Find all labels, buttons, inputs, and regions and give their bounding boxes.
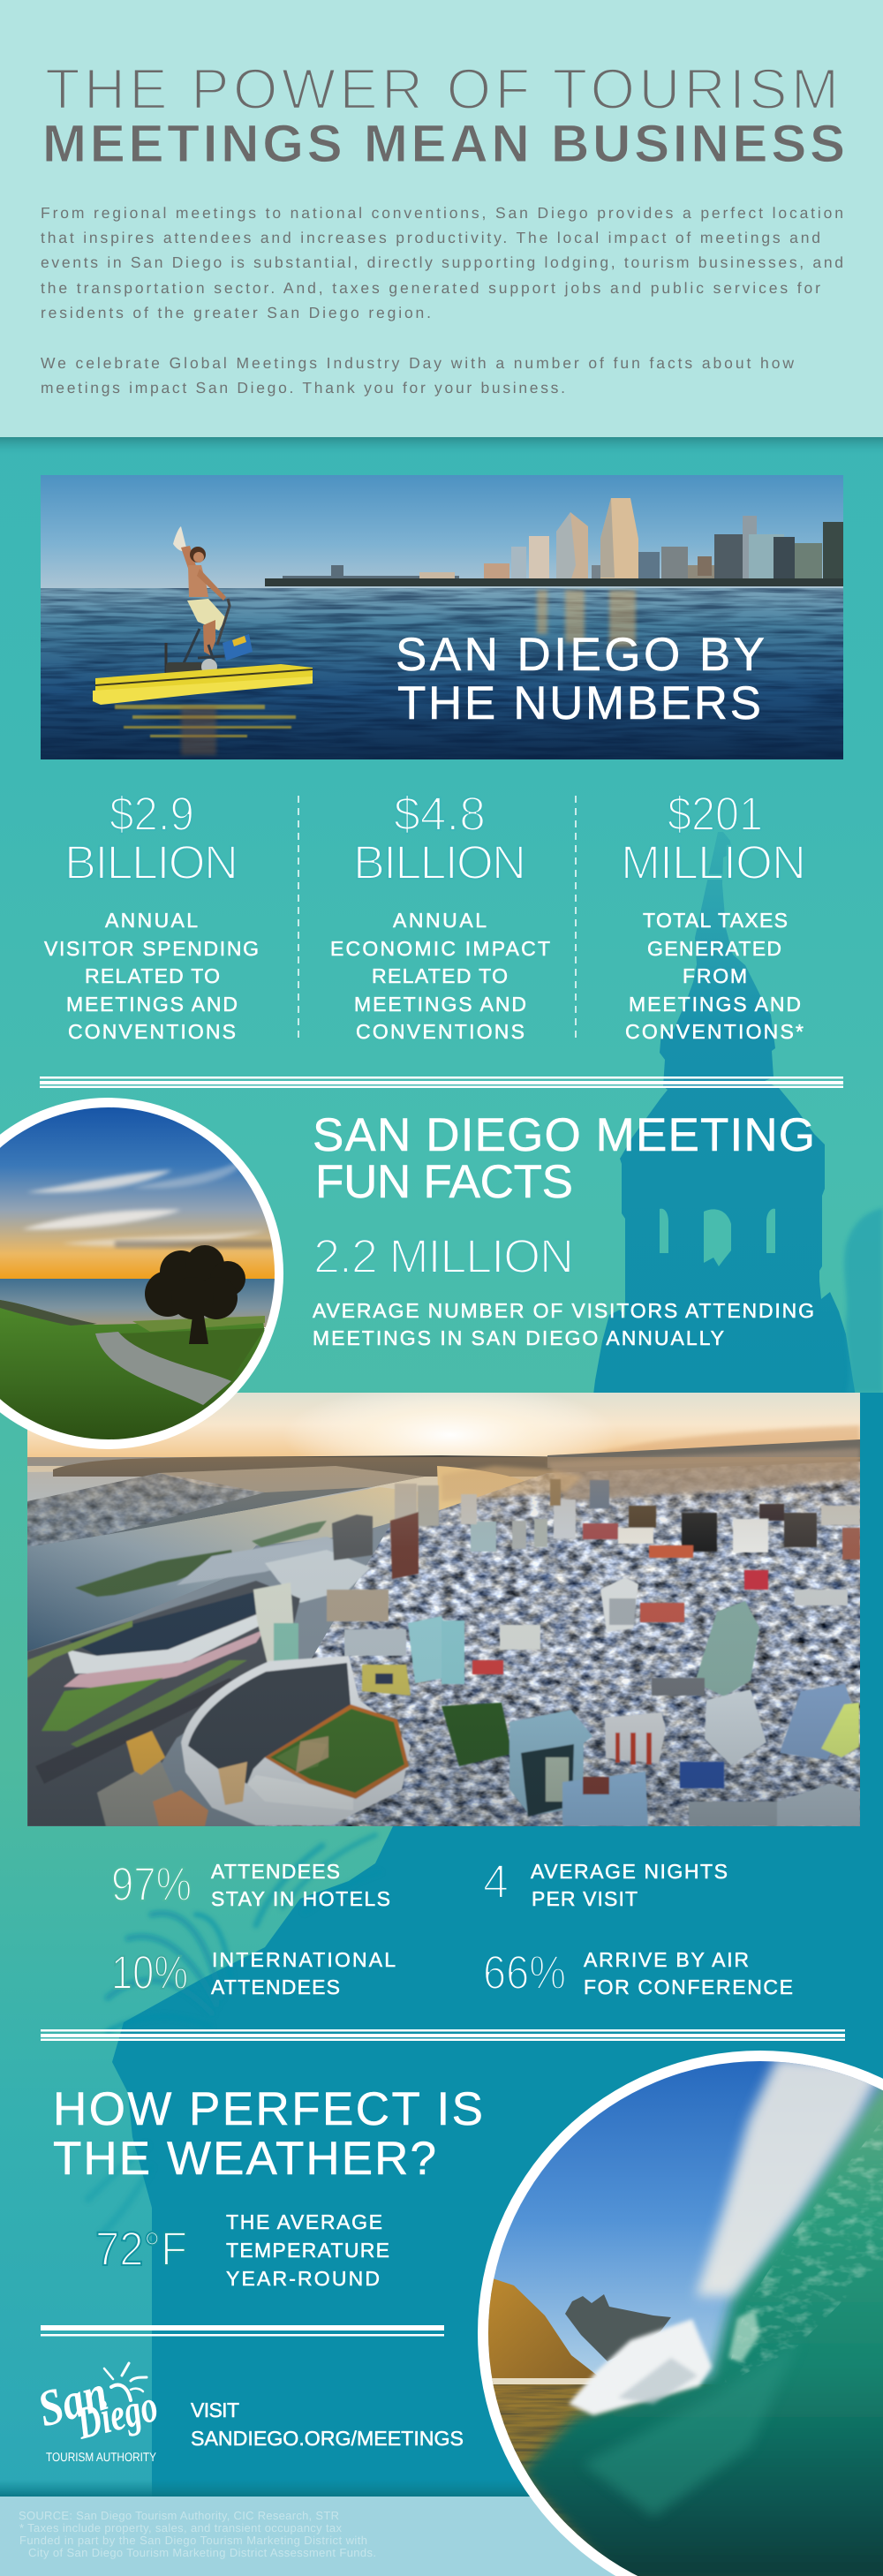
tower silhouette bbox=[590, 832, 860, 1423]
stat: 66 percent: FOR CONFERENCE bbox=[584, 1975, 793, 1998]
weather heading: THE WEATHER? bbox=[53, 2133, 436, 2185]
stat: 4 nights bbox=[483, 1855, 728, 1910]
stat: 10 percent: INTERNATIONAL bbox=[212, 1948, 396, 1971]
stat: 72 degrees: THE AVERAGE bbox=[226, 2210, 382, 2233]
intro text block: We celebrate Global Meetings Industry Day with a number of fun facts about how bbox=[41, 354, 794, 372]
fun facts text: MEETINGS IN SAN DIEGO ANNUALLY bbox=[313, 1326, 724, 1349]
stat: 201 million bbox=[621, 788, 806, 1043]
spray bbox=[696, 2058, 883, 2296]
source text: City of San Diego Tourism Marketing District Assessment Funds. bbox=[28, 2546, 376, 2559]
stat: 4.8 billion: $4.8 bbox=[394, 788, 486, 841]
stat: 66 percent: 66% bbox=[483, 1946, 566, 1999]
stat: 4.8 billion: MEETINGS AND bbox=[354, 993, 526, 1016]
petco park stadium bbox=[181, 1656, 411, 1825]
hero heading: SAN DIEGO BY bbox=[396, 629, 765, 681]
stat: 2.9 billion: RELATED TO bbox=[85, 964, 220, 987]
right palm silhouette bbox=[844, 1208, 883, 1394]
source text: * Taxes include property, sales, and transient occupancy tax bbox=[19, 2521, 343, 2534]
water foreground bbox=[477, 2384, 883, 2576]
stat: 2.9 billion: MEETINGS AND bbox=[66, 993, 238, 1016]
stat: 2.9 billion: VISITOR SPENDING bbox=[44, 937, 259, 960]
stat: 97 percent: STAY IN HOTELS bbox=[211, 1887, 390, 1910]
surf wave photo circle bbox=[477, 2051, 883, 2576]
stat: 10 percent: 10% bbox=[111, 1946, 188, 1999]
stat: 72 degrees: YEAR-ROUND bbox=[226, 2267, 380, 2290]
title bbox=[42, 57, 845, 173]
person on water bike bbox=[93, 526, 313, 755]
aerial city photo bbox=[27, 1384, 860, 1826]
fun facts text bbox=[313, 1109, 815, 1349]
San Diego Tourism Authority logo bbox=[32, 2363, 162, 2464]
stat: 66 percent bbox=[483, 1946, 793, 1999]
golf course photo circle bbox=[0, 1098, 283, 1462]
wave body bbox=[521, 2058, 883, 2576]
source text: Funded in part by the San Diego Tourism Marketing District with bbox=[19, 2534, 367, 2547]
intro text block: residents of the greater San Diego region. bbox=[41, 304, 431, 321]
stat: 72 degrees: TEMPERATURE bbox=[226, 2239, 389, 2262]
weather heading bbox=[53, 2083, 483, 2185]
visit link bbox=[191, 2398, 464, 2450]
downtown towers bbox=[442, 1479, 860, 1826]
fun facts text: SAN DIEGO MEETING bbox=[313, 1109, 815, 1161]
stat: 2.9 billion: ANNUAL bbox=[105, 909, 198, 932]
convention center bbox=[27, 1581, 300, 1826]
hero heading: THE NUMBERS bbox=[397, 677, 761, 729]
intro text block: meetings impact San Diego. Thank you for your business. bbox=[41, 379, 565, 397]
source text: SOURCE: San Diego Tourism Authority, CIC Research, STR bbox=[19, 2509, 339, 2522]
stat: 4.8 billion: BILLION bbox=[353, 836, 526, 889]
stat: 66 percent: ARRIVE BY AIR bbox=[584, 1948, 749, 1971]
source text bbox=[19, 2509, 376, 2559]
stat: 201 million: FROM bbox=[683, 964, 747, 987]
fun facts text: FUN FACTS bbox=[315, 1156, 573, 1208]
stat: 4 nights: PER VISIT bbox=[532, 1887, 638, 1910]
stat: 10 percent bbox=[111, 1946, 396, 1999]
stat: 201 million: TOTAL TAXES bbox=[643, 909, 788, 932]
intro text block: the transportation sector. And, taxes generated support jobs and public services for bbox=[41, 279, 820, 297]
stat: 4.8 billion: CONVENTIONS bbox=[356, 1020, 525, 1043]
intro text block: events in San Diego is substantial, directly supporting lodging, tourism businesses, and bbox=[41, 253, 843, 271]
San Diego Tourism Authority logo: San bbox=[32, 2364, 114, 2437]
title: MEETINGS MEAN BUSINESS bbox=[42, 114, 845, 173]
stat: 201 million: MEETINGS AND bbox=[629, 993, 801, 1016]
fun facts text: AVERAGE NUMBER OF VISITORS ATTENDING bbox=[313, 1299, 814, 1322]
visit link: VISIT bbox=[191, 2398, 239, 2421]
stat: 2.9 billion: BILLION bbox=[64, 836, 238, 889]
intro text block bbox=[41, 204, 843, 397]
stat: 2.9 billion: $2.9 bbox=[109, 788, 194, 841]
San Diego Tourism Authority logo: TOURISM AUTHORITY bbox=[46, 2450, 157, 2464]
stat: 72 degrees bbox=[95, 2210, 389, 2290]
cliff bbox=[488, 2278, 597, 2391]
title: THE POWER OF TOURISM bbox=[45, 57, 839, 121]
stat: 201 million: $201 bbox=[668, 788, 763, 841]
stat: 201 million: CONVENTIONS* bbox=[625, 1020, 804, 1043]
stat: 97 percent bbox=[111, 1858, 390, 1911]
stat: 2.9 billion: CONVENTIONS bbox=[68, 1020, 236, 1043]
deep teal shape with lower palm and trunk bbox=[88, 1393, 883, 2499]
stat: 4.8 billion: ANNUAL bbox=[393, 909, 487, 932]
stat: 4.8 billion: RELATED TO bbox=[372, 964, 508, 987]
hero photo: pedal boat on San Diego Bay with skyline bbox=[41, 475, 843, 759]
embarcadero park island bbox=[75, 1550, 233, 1597]
stat: 10 percent: ATTENDEES bbox=[211, 1975, 340, 1998]
stat: 97 percent: ATTENDEES bbox=[211, 1860, 340, 1883]
San Diego Tourism Authority logo: Diego bbox=[71, 2381, 162, 2450]
icon: sun rays bbox=[104, 2363, 147, 2400]
stat: 4.8 billion: ECONOMIC IMPACT bbox=[330, 937, 550, 960]
fun facts text: 2.2 MILLION bbox=[313, 1230, 574, 1283]
intro text block: From regional meetings to national conventions, San Diego provides a perfect location bbox=[41, 204, 843, 222]
stat: 4 nights: 4 bbox=[483, 1855, 509, 1908]
stat: 72 degrees: 72°F bbox=[95, 2223, 187, 2276]
header panel bbox=[0, 0, 883, 437]
intro text block: that inspires attendees and increases productivity. The local impact of meetings and bbox=[41, 229, 820, 246]
footer source panel bbox=[0, 2497, 883, 2576]
visit link: SANDIEGO.ORG/MEETINGS bbox=[191, 2427, 464, 2450]
hero heading bbox=[397, 638, 765, 720]
city blocks texture bbox=[265, 1462, 860, 1826]
weather heading: HOW PERFECT IS bbox=[53, 2083, 483, 2135]
stat: 201 million: GENERATED bbox=[647, 937, 781, 960]
stat: 201 million: MILLION bbox=[621, 836, 806, 889]
stat: 4.8 billion bbox=[330, 788, 550, 1043]
rooftop park bbox=[42, 1678, 163, 1731]
plaza and hotel towers bbox=[97, 1761, 175, 1826]
stat: 2.9 billion bbox=[44, 788, 259, 1043]
tree bbox=[145, 1245, 245, 1344]
stat: 97 percent: 97% bbox=[111, 1858, 192, 1911]
stat: 4 nights: AVERAGE NIGHTS bbox=[531, 1860, 728, 1883]
